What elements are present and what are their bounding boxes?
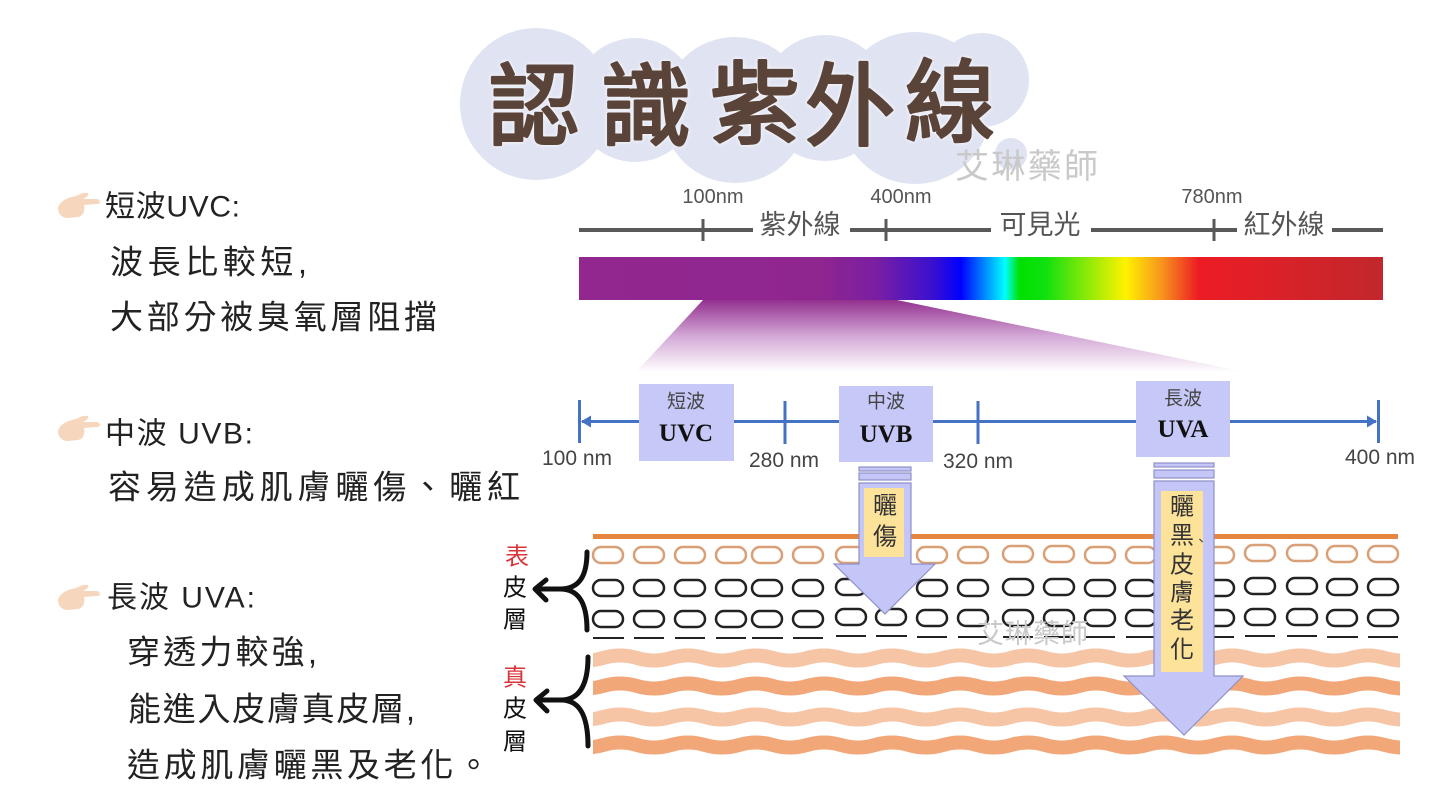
title text: 認 — [489, 58, 579, 158]
wavelength labels: 100nm — [682, 186, 744, 208]
band labels: 紅外線 — [1244, 210, 1324, 240]
wavelength labels — [682, 186, 1243, 208]
epidermis top line — [593, 534, 1398, 539]
box: UVA — [1136, 381, 1230, 457]
ruler lines — [579, 219, 1383, 241]
heading: UVB: 中波 UVB: — [105, 418, 253, 450]
box: UVA: UVA — [1158, 416, 1208, 443]
title text: 外 — [805, 58, 895, 158]
epidermis black cells — [593, 578, 1398, 627]
title text — [489, 54, 995, 158]
label: dermis: 皮 — [503, 696, 527, 722]
UVA effect label — [1161, 491, 1208, 672]
UVA effect label: 皮 — [1170, 552, 1194, 578]
title text: 紫 — [710, 56, 800, 156]
text: UVA line 3: 造成肌膚曬黑及老化。 — [127, 746, 490, 784]
scale labels: 280 nm — [749, 449, 819, 472]
bracket arrow — [535, 552, 587, 630]
watermark top: 艾琳藥師 — [955, 148, 1098, 186]
watermark on skin: 艾琳藥師 — [977, 619, 1088, 649]
UVB effect label — [864, 488, 904, 557]
left text: UVA — [58, 582, 490, 784]
UVB effect label: 曬 — [873, 492, 897, 520]
icon: pointing hand — [58, 193, 100, 218]
title text: 線 — [905, 54, 995, 154]
title with bubbles — [460, 28, 1029, 184]
text: UVB line 1: 容易造成肌膚曬傷、曬紅 — [108, 468, 520, 506]
arrow: UVA tanning and aging — [1124, 463, 1243, 735]
label: epidermis — [503, 544, 529, 634]
UVA arrow shape — [1124, 463, 1243, 735]
wavelength labels: 400nm — [870, 186, 932, 208]
UVB effect label: 傷 — [873, 524, 897, 550]
band labels: 紫外線 — [760, 210, 840, 240]
spectrum gradient bar — [579, 257, 1383, 300]
spectrum ruler — [579, 186, 1383, 241]
skin diagram — [569, 534, 1419, 748]
box: UVC — [639, 384, 734, 461]
box: UVB: UVB — [860, 421, 912, 448]
label: epidermis: 皮 — [503, 574, 527, 602]
label: dermis: 真 — [503, 664, 527, 692]
UVA effect label: 膚 — [1170, 580, 1194, 606]
label: dermis — [503, 664, 527, 756]
purple zoom funnel — [636, 300, 1245, 372]
scale labels: 320 nm — [943, 450, 1013, 473]
left text: UVC — [58, 190, 437, 336]
box: UVB: 中波 — [867, 390, 905, 412]
box: UVC: 短波 — [667, 390, 705, 412]
band labels: 可見光 — [1000, 210, 1080, 240]
arrow: UVB sunburn — [834, 467, 935, 614]
icon: pointing hand — [58, 585, 100, 610]
dermis waves — [569, 656, 1419, 748]
wavelength labels: 780nm — [1181, 186, 1243, 208]
bracket arrow — [536, 657, 588, 746]
title bubbles — [460, 28, 1029, 184]
label: epidermis: 層 — [503, 606, 527, 634]
axis arrowheads — [581, 416, 1377, 428]
title text: 識 — [601, 58, 691, 158]
UVA effect label: 曬 — [1170, 494, 1194, 520]
band labels — [760, 210, 1324, 240]
UV wavelength scale — [542, 381, 1415, 473]
heading: UVA: 長波 UVA: — [107, 582, 255, 614]
heading: UVC: 短波UVC: — [105, 190, 240, 224]
left text: UVB — [58, 416, 520, 506]
epidermis orange cells — [593, 545, 1398, 563]
dermis bracket and label — [503, 657, 588, 756]
basal dashes — [593, 636, 1398, 638]
UVA effect label: 化 — [1170, 636, 1194, 664]
box: UVC: UVC — [659, 420, 713, 447]
label: dermis: 層 — [503, 728, 527, 756]
scale labels: 400 nm — [1345, 446, 1415, 469]
UVA effect label: 黑 — [1170, 522, 1194, 550]
UVA effect label: 、 — [1194, 533, 1208, 549]
epidermis bracket and label — [503, 544, 587, 634]
text: UVC line 1: 波長比較短, — [110, 244, 307, 280]
scale labels: 100 nm — [542, 447, 612, 470]
text: UVC line 2: 大部分被臭氧層阻擋 — [110, 298, 437, 336]
box: UVB — [839, 386, 933, 462]
scale axis — [580, 400, 1378, 444]
scale labels — [542, 446, 1415, 473]
text: UVA line 2: 能進入皮膚真皮層, — [128, 690, 415, 728]
UVB arrow shape — [834, 467, 935, 614]
icon: pointing hand — [58, 416, 100, 441]
label: epidermis: 表 — [505, 544, 529, 570]
box: UVA: 長波 — [1164, 388, 1202, 410]
UVA effect label: 老 — [1170, 608, 1194, 634]
text: UVA line 1: 穿透力較強, — [127, 634, 317, 670]
